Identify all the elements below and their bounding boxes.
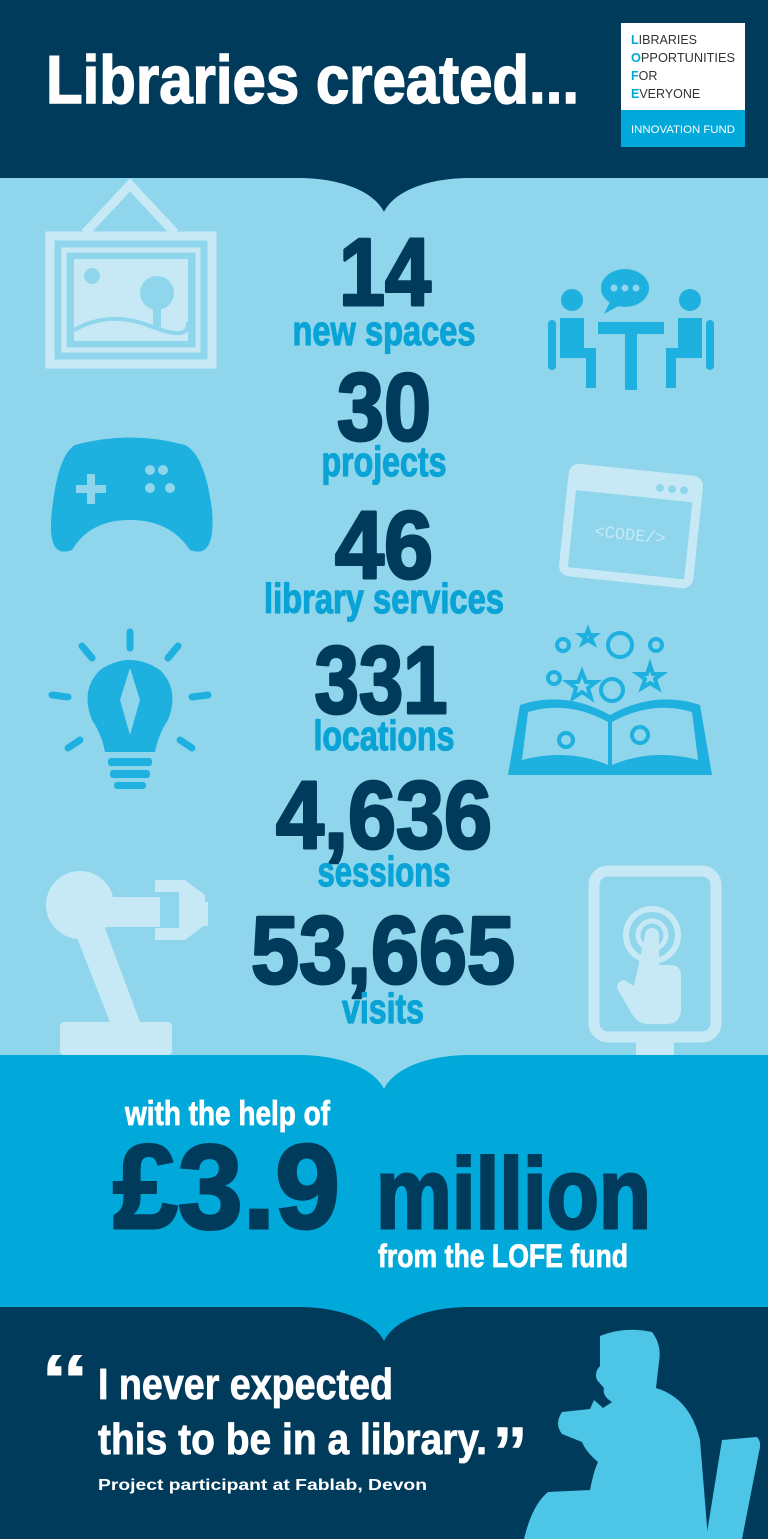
funding text: with the help of — [124, 1095, 331, 1133]
quote text: “ — [40, 1341, 90, 1421]
icon: tablet with touch — [594, 871, 716, 1055]
stats column: new spaces — [292, 307, 476, 354]
header band — [0, 0, 768, 212]
icon: picture frame — [50, 185, 212, 364]
stats column: 53,665 — [251, 897, 515, 1004]
logo: LIBRARIES — [631, 33, 697, 47]
logo: OPPORTUNITIES — [631, 51, 735, 65]
icon: people at table — [548, 269, 714, 390]
stats column: 46 — [335, 492, 433, 599]
stats column: locations — [314, 712, 454, 759]
quote text: I never expected — [98, 1360, 393, 1409]
funding panel: million — [376, 1138, 651, 1250]
icon: open book with smileys — [508, 630, 712, 775]
quote text — [40, 1341, 528, 1494]
stats column: sessions — [318, 848, 450, 895]
funding panel: from the LOFE fund — [378, 1238, 628, 1274]
stats column: projects — [322, 438, 446, 485]
stats column: 14 — [339, 219, 431, 326]
logo: INNOVATION FUND — [631, 124, 735, 136]
stats column: 30 — [337, 354, 431, 461]
stats column: visits — [342, 985, 424, 1032]
stats column: 331 — [314, 627, 448, 734]
logo — [621, 23, 745, 147]
silhouette: seated speaker with chair — [524, 1330, 760, 1539]
icon: game controller — [51, 438, 213, 552]
icon: code window: <CODE/> — [593, 523, 666, 550]
logo: EVERYONE — [631, 87, 700, 101]
icon: light bulb with pen nib — [52, 632, 208, 789]
icon: code window — [563, 468, 699, 584]
stats column: 4,636 — [276, 762, 492, 869]
stats column: library services — [264, 575, 504, 622]
quote panel — [0, 1307, 768, 1539]
quote text: ” — [492, 1413, 528, 1493]
funding panel: £3.9 — [113, 1120, 340, 1254]
stats column — [251, 219, 515, 1032]
quote text: this to be in a library. — [98, 1415, 487, 1464]
funding panel — [0, 1055, 768, 1350]
title: Libraries created... — [46, 42, 579, 118]
logo: FOR — [631, 69, 657, 83]
icon: robot arm — [46, 871, 208, 1055]
quote text: Project participant at Fablab, Devon — [98, 1477, 427, 1494]
